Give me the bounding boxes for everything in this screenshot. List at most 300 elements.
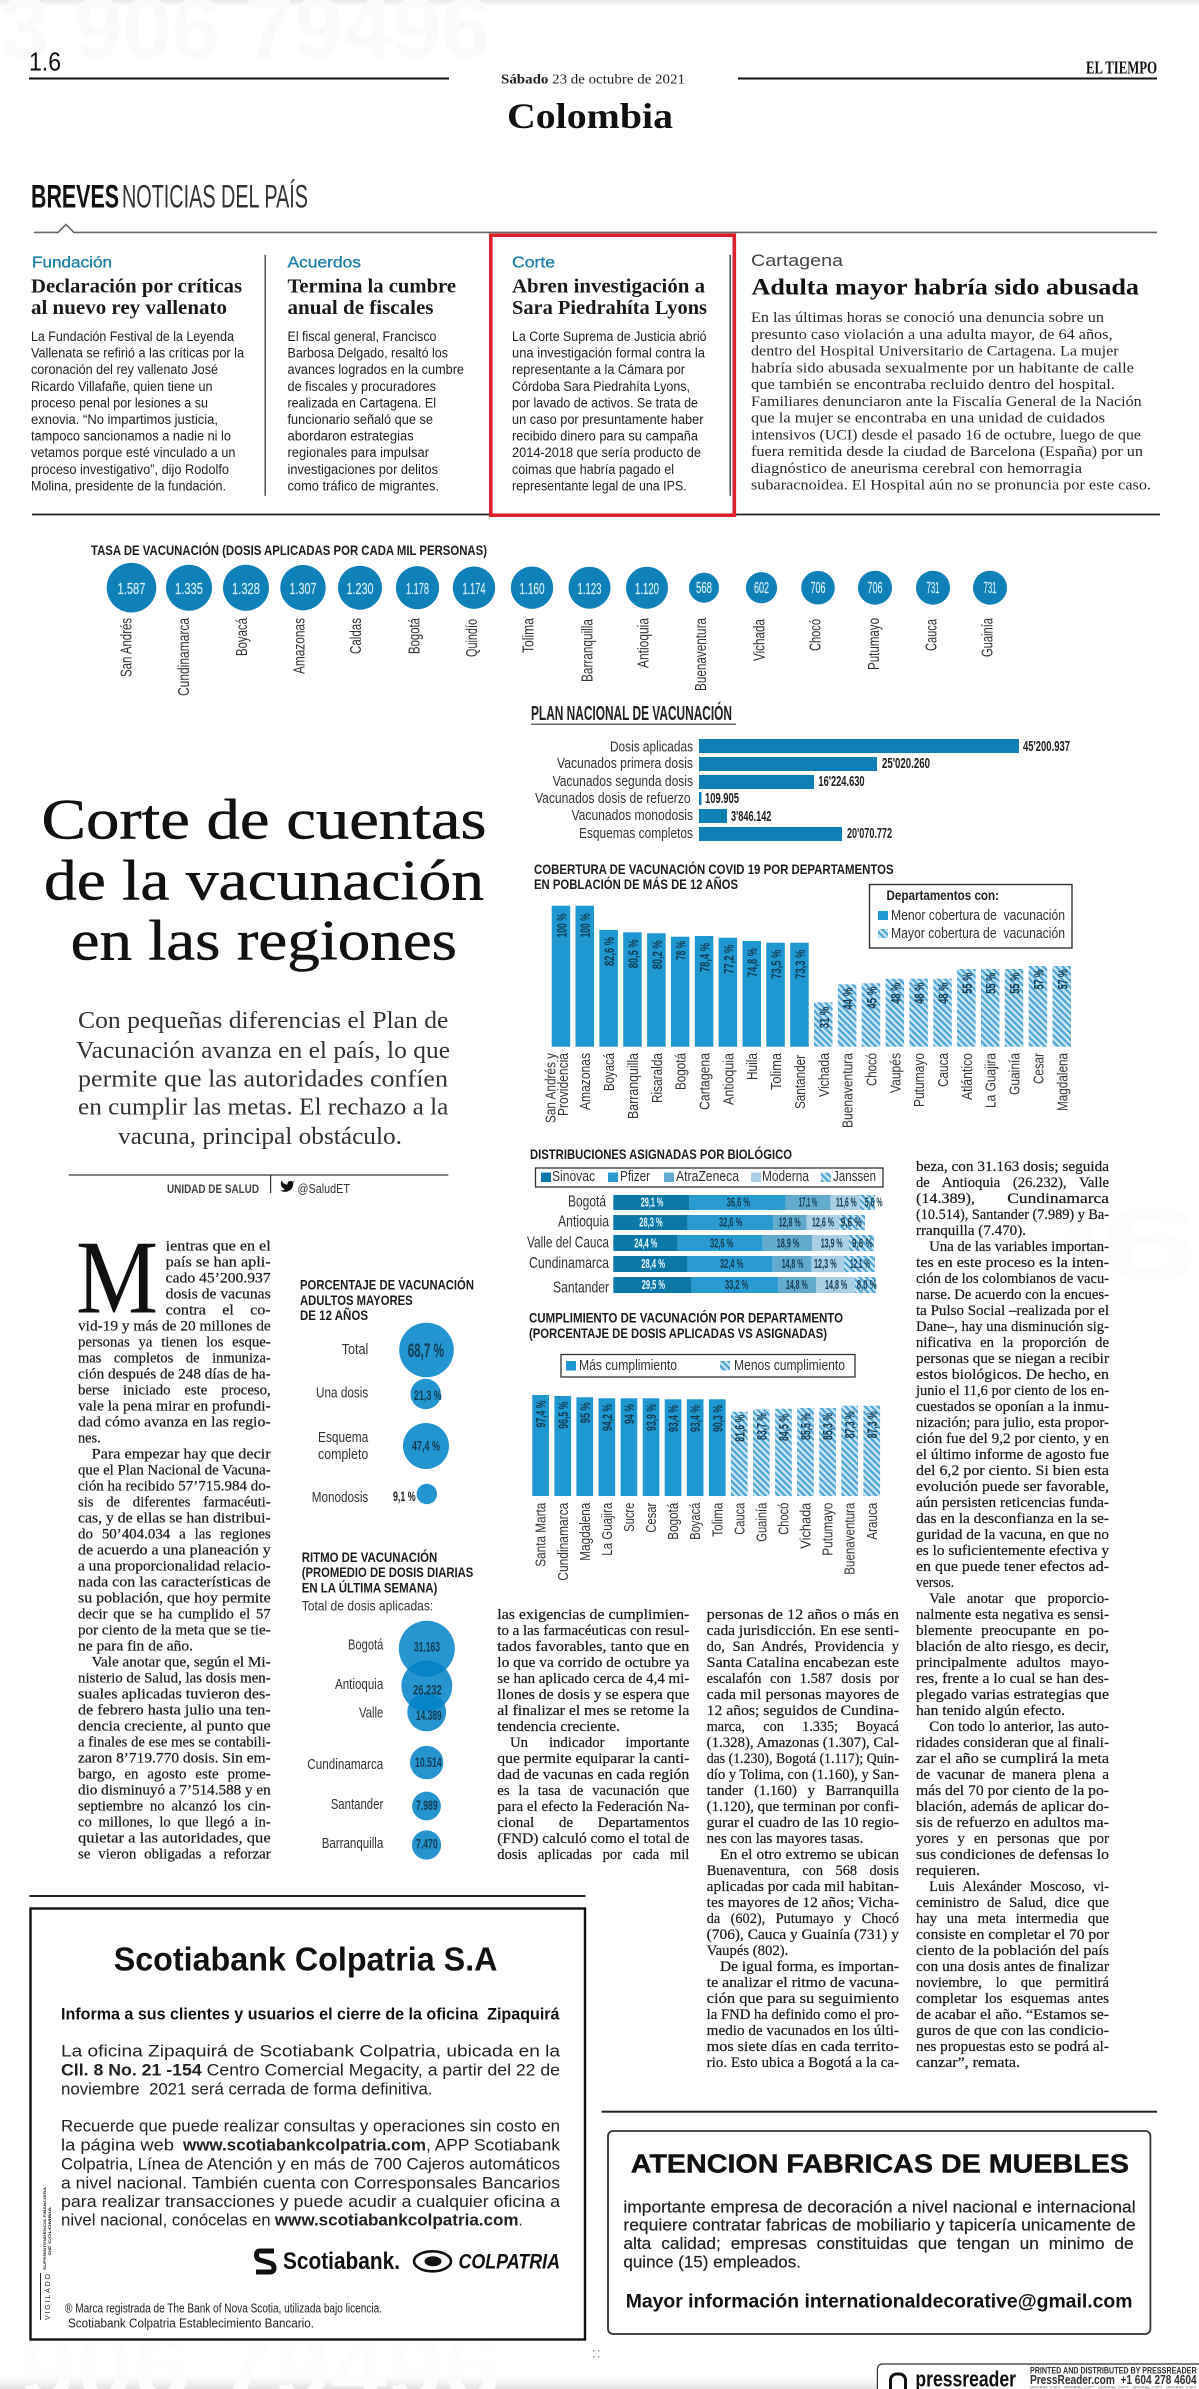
kicker: Corte [512,255,555,272]
segment values: 11,6 % [836,1195,857,1210]
main headline [42,788,486,973]
icon: pressreader mark [890,2374,906,2389]
ad body text: a nivel nacional. También cuenta con Corresponsales Bancarios [61,2173,560,2192]
bar values: 87,3 % [842,1411,858,1438]
ad body text: la página web [61,2136,174,2155]
article column 4: Vale anotar que proporcio- [929,1591,1109,1607]
article column 4: en que puede tener efectos ad- [916,1559,1109,1575]
watermark: copy number: 96 [1000,1186,1199,1303]
article column 4: nalmente esta negativa es sensi- [916,1607,1109,1623]
region labels: Vichada [752,619,769,661]
article column 1: sis de diferentes farmacéuti- [78,1494,271,1510]
article column 1: Para empezar hay que decir [92,1446,271,1462]
department labels: Boyacá [687,1502,704,1540]
bubble values: 14.389 [416,1707,442,1723]
bubble values: 1.120 [635,581,659,598]
logo: Colpatria: COLPATRIA [458,2250,560,2273]
article column 4: yores y en personas que por [916,1831,1109,1847]
body text: La Corte Suprema de Justicia abrió [512,329,706,344]
row labels: Cundinamarca [529,1255,609,1272]
article column 3: En el otro extremo se ubican [720,1847,900,1863]
chart: tasa de vacunación: 731 [984,580,997,597]
region labels: Cundinamarca [176,618,193,696]
department labels: Vaupés [887,1053,904,1093]
article column 2: es la tasa de vacunación que [497,1783,689,1799]
bubble values: 1.178 [406,581,429,598]
legend: Departamentos con: [886,887,999,903]
row labels: completo [318,1446,368,1463]
article column 3: tander (1.160) y Barranquilla [707,1783,900,1799]
article column 1: a una proporcionalidad relacio- [78,1558,271,1574]
logo: Colpatria [414,2250,560,2273]
bar values: 3'846.142 [731,808,771,825]
kicker: Fundación [32,255,112,272]
department labels: Guainía [753,1502,770,1542]
bar labels: Esquemas completos [579,825,693,842]
article column 4: de Antioquia (26.232), Valle [916,1175,1109,1191]
department labels: Chocó [864,1053,880,1086]
article column 4: estos biológicos. De hecho, en [916,1367,1110,1383]
subheadline [76,1008,450,1150]
subheadline: Vacunación avanza en el país, lo que [76,1038,450,1064]
article column 2: para el efecto la Federación Na- [497,1799,689,1815]
newspaper logo: EL TIEMPO [1086,58,1157,78]
article column 1: septiembre no alcanzó los cin- [78,1798,271,1814]
byline: @SaludET [298,1182,350,1196]
article column 2: lo que va corrido de octubre ya [497,1655,690,1671]
segment values: 14,8 % [782,1256,804,1271]
region labels: Bogotá [407,618,424,654]
region labels: Cauca [924,619,941,651]
ad body text: nivel nacional, conócelas en [61,2211,271,2230]
bar labels [535,739,693,842]
chart: tasa de vacunación [91,541,1007,696]
article column 4: consiste en completar el 70 por [916,1927,1109,1943]
article column 2: cional de Departamentos [497,1815,690,1831]
article column 4: ciento de la población del país [916,1943,1109,1959]
bar values: 93,4 % [665,1405,681,1432]
panel: brief Acuerdos [288,255,464,493]
bar values: 85,5 % [798,1413,814,1440]
department labels: Cesar [1030,1053,1047,1084]
bar values: 94 % [621,1404,637,1424]
department labels: La Guajira [983,1052,1000,1108]
article column 1: vid-19 y más de 20 millones de [78,1318,271,1334]
bar values: 82,6 % [601,937,617,966]
department labels: Santander [792,1055,809,1109]
chart title: COBERTURA DE VACUNACIÓN COVID 19 POR DEPARTAMENTOS [534,860,894,877]
body text: como tráfico de migrantes. [288,478,439,493]
bar labels: Vacunados segunda dosis [553,773,693,790]
bar values: 87,3 % [864,1411,880,1438]
article column 4: hay una meta intermedia que [916,1911,1109,1927]
article column 3: das (1.230), Bogotá (1.117); Quin- [707,1751,899,1767]
icon: twitter bird [280,1180,295,1192]
article column 1: mas completos de inmuniza- [78,1350,271,1366]
bar values: 78,4 % [696,943,712,972]
article column 1: quietar a las autoridades, que [78,1830,271,1846]
article column 4: requieren. [916,1863,980,1879]
department labels: Barranquilla [625,1052,642,1119]
bar values: 45'200.937 [1023,738,1070,755]
main headline: en las regiones [71,910,457,973]
department labels: Cauca [731,1502,748,1535]
body text: Familiares denunciaron ante la Fiscalía General de la Nación [751,394,1142,410]
bar values: 73,5 % [768,949,784,979]
chart title [534,860,894,892]
headline: al nuevo rey vallenato [31,297,227,319]
chart: porcentaje de vacunación adultos [300,1275,474,1506]
body text: Ricardo Villafañe, quien tiene un [31,379,212,394]
body text: recibido dinero para su campaña [512,429,698,444]
subheadline: vacuna, principal obstáculo. [118,1124,402,1150]
article column 4: evolución puede ser favorable, [916,1479,1109,1495]
body text: Molina, presidente de la fundación. [31,478,226,493]
body text: investigaciones por delitos [288,462,438,477]
department labels: Tolima [768,1052,785,1090]
department labels: San Andrés y [543,1053,560,1123]
body text: avances logrados en la cumbre [288,362,464,377]
hatched bars [814,966,1071,1047]
article column 1: decir que se ha cumplido el 57 [78,1606,271,1622]
department labels: Huila [744,1052,761,1080]
department labels: Santa Marta [533,1502,550,1567]
headline: Sara Piedrahíta Lyons [512,297,707,319]
article column 4: zar el año se cumplirá la meta [916,1751,1110,1767]
article column 4: guridad de la vacuna, en que no [916,1527,1109,1543]
article column 1: suales aplicadas tuvieron des- [78,1686,271,1702]
article column 1: su población, que hoy permite [78,1590,271,1606]
bar values: 90,3 % [709,1405,725,1432]
body text: tampoco sancionamos a nadie ni lo [31,429,231,444]
ad title: Scotiabank Colpatria S.A [114,1941,497,1978]
article column 1: dosis de vacunas [166,1286,271,1302]
article column 1: dad cómo avanza en las regio- [78,1414,271,1430]
row labels: Total [342,1341,368,1358]
department labels: Cartagena [696,1052,714,1110]
article column 4: blación, además de aplicar do- [916,1799,1109,1815]
bar values: 83,7 % [753,1413,769,1440]
article column 3: ción que para su seguimiento [707,1991,899,2007]
article column 4: das en la desconfianza en la se- [916,1511,1109,1527]
article column 4: aún persisten reticencias funda- [916,1495,1109,1511]
segment values: 33,2 % [725,1277,749,1292]
ad body text: Cll. 8 No. 21 -154 [61,2061,202,2080]
article column 4: rranquilla (7.470). [916,1223,1026,1239]
body text: fuera remitida desde la ciudad de Barcelona (España) por un [751,444,1144,460]
bubble values: 568 [696,580,712,597]
bar values: 74,8 % [744,948,760,977]
headline [512,276,707,319]
page number: 1.6 [29,47,61,77]
bar values [554,913,1070,1028]
article column 1: que el Plan Nacional de Vacuna- [78,1462,271,1478]
chart: cobertura de vacunación [534,860,1072,1128]
row labels: Cundinamarca [307,1756,384,1773]
article column 1: dencia creciente, al punto que [78,1718,271,1734]
bubble values [118,580,997,598]
bubble values: 7.989 [416,1797,438,1813]
body text: Barbosa Delgado, resaltó los [288,346,448,361]
bubbles [399,1621,455,1860]
article column 4: sus condiciones de defensas lo [916,1847,1109,1863]
bubble values: 31.163 [414,1638,440,1654]
department labels: Cundinamarca [555,1502,572,1581]
article column 3: aplicadas por cada mil habitan- [707,1879,899,1895]
department labels: Putumayo [820,1503,837,1556]
bar values: 25'020.260 [882,755,930,772]
segment values [634,1195,883,1292]
chart title: TASA DE VACUNACIÓN (DOSIS APLICADAS POR CADA MIL PERSONAS) [91,541,487,558]
region labels: Antioquia [635,618,652,668]
body text: En las últimas horas se conoció una denuncia sobre un [751,310,1105,326]
legend: Moderna [762,1168,810,1185]
article column 1: a finales de ese mes se contabili- [78,1734,271,1750]
article column 4: ta Pulso Social –realizada por el [916,1303,1109,1319]
stacked bar: Antioquia [613,1215,865,1230]
department labels: Bogotá [665,1502,682,1540]
legend: Janssen [833,1168,876,1185]
body text: coronación del rey vallenato José [31,362,218,377]
body text [512,329,706,493]
segment values: 13,9 % [821,1236,843,1251]
department labels: Arauca [864,1502,881,1540]
chart title [300,1275,474,1323]
article column 1: de febrero hasta julio una ten- [78,1702,271,1718]
legend [870,884,1072,948]
row labels: Bogotá [348,1636,384,1653]
article column 1: se vieron obligadas a reforzar [78,1846,271,1862]
segment values: 29,1 % [641,1195,664,1210]
region labels: Guainía [979,618,996,657]
article column 1: cas, y de ellas se han distribui- [78,1510,271,1526]
article column 3: Buenaventura, con 568 dosis [707,1863,899,1879]
region labels: San Andrés [118,618,136,677]
bubble values: 1.160 [520,581,545,598]
department labels: Cauca [935,1052,952,1087]
article column 4: Dane–, hay una disminución sig- [916,1319,1109,1335]
headline: Termina la cumbre [288,276,456,298]
article column 3: do, San Andrés, Providencia y [707,1639,900,1655]
chart: plan nacional de vacunación [531,701,1070,842]
article column 1: ción después de 248 días de ha- [78,1366,271,1382]
segment values: 12,8 % [779,1215,801,1230]
bar values: 97,4 % [533,1400,549,1428]
article column 4: del 6,2 por ciento. Si bien esta [916,1463,1110,1479]
body text: abordaron estrategias [288,429,414,444]
ad body text: , APP Scotiabank [426,2136,561,2155]
row labels: Antioquia [335,1676,384,1693]
chart: ritmo de vacunación [302,1548,473,1860]
article column 4: nificativa en la proporción de [916,1335,1109,1351]
department labels: Magdalena [1054,1052,1071,1111]
article column 3: dío y Tolima, con (1.160), y San- [707,1767,899,1783]
article column 1: cado 45’200.937 [166,1270,271,1286]
segment values: 17,1 % [799,1195,818,1210]
department labels: Risaralda [649,1052,666,1103]
region labels: Amazonas [291,618,308,674]
bubble values: 7.470 [416,1835,438,1851]
subheadline: permite que las autoridades confíen [78,1066,448,1092]
vigilado stamp: VIGILADO [45,2273,52,2320]
row labels: Esquema [318,1429,369,1446]
ad body text: alta calidad; empresas constituidas que tengan un minimo de [623,2234,1134,2253]
ad title: ATENCION FABRICAS DE MUEBLES [631,2149,1129,2179]
headline: anual de fiscales [288,297,434,319]
body text: que también se encontraba recluido dentro del hospital. [751,377,1115,393]
region labels [118,618,996,696]
article column 2: to a las farmacéuticas con resul- [497,1623,689,1639]
department labels: Amazonas [577,1053,594,1110]
bubble values: 21,3 % [414,1387,442,1403]
bubble values: 1.174 [462,581,486,598]
ad subtitle: Informa a sus clientes y usuarios el cierre de la oficina Zipaquirá [61,2004,560,2023]
article column 4: ridades consideran que al finali- [916,1735,1109,1751]
row labels: Santander [331,1796,383,1813]
article column 1: personas ya tienen los esque- [78,1334,271,1350]
breves heading: BREVES [31,179,119,215]
department labels: Antioquia [720,1052,737,1105]
department labels: Chocó [776,1503,792,1535]
legend: Más cumplimiento [579,1357,677,1374]
region labels: Boyacá [234,618,251,656]
bubble values: 1.335 [175,581,203,598]
ad body text [61,2042,561,2230]
chart title: ADULTOS MAYORES [300,1292,413,1308]
ad body text: noviembre 2021 será cerrada de forma definitiva. [61,2079,432,2098]
region labels: Buenaventura [693,618,710,691]
body text: exnovia. “No impartimos justicia, [31,412,218,427]
department labels [533,1502,881,1581]
article column 1: por ciento de la meta que se tie- [78,1622,271,1638]
article column 3: Vaupés (802). [707,1943,788,1959]
bar values [533,1400,880,1442]
article column 3: escalafón con 1.587 dosis por [707,1671,899,1687]
article column 4: canzar”, remata. [916,2055,1020,2071]
legend [536,1168,883,1187]
bar values: 80,5 % [625,939,641,968]
bubble values: 1.230 [346,581,374,598]
body text [288,329,464,493]
article column 1: nes. [78,1430,101,1446]
article column 4: tes en este proceso es la inten- [916,1255,1109,1271]
ad body text: . [519,2211,522,2230]
article column 3: (1.328), Amazonas (1.307), Cal- [707,1735,899,1751]
body text: representante legal de una IPS. [512,478,687,493]
legend: Mayor cobertura de vacunación [891,925,1065,942]
segment values: 32,6 % [719,1215,743,1230]
article column 1: zaron 8’719.770 dosis. Sin em- [78,1750,271,1766]
bar labels: Vacunados primera dosis [557,755,693,772]
headline: Abren investigación a [512,276,705,298]
row labels [312,1341,369,1506]
body text: un caso por presuntamente haber [512,412,704,427]
segment values: 32,4 % [720,1256,744,1271]
article column 1: contra el co- [166,1302,271,1318]
department labels [543,1052,1071,1128]
row labels [527,1194,610,1297]
bar values: 20'070.772 [847,825,892,842]
bubble values: 731 [926,580,940,597]
solid bars [552,906,809,1047]
article column 4: sis de refuerzo en adultos ma- [916,1815,1109,1831]
body text: habría sido abusada sexualmente por un habitante de calle [751,360,1134,376]
article column 4: (10.514), Santander (7.989) y Ba- [916,1207,1109,1223]
subheadline: en cumplir las metas. El rechazo a la [78,1095,449,1121]
headline [288,276,456,319]
article column 2: se han aplicado cerca de 4,4 mi- [497,1671,689,1687]
chart title: EN POBLACIÓN DE MÁS DE 12 AÑOS [534,875,738,892]
article column 4: beza, con 31.163 dosis; seguida [916,1159,1110,1175]
article column 3 [707,1607,900,2071]
bar values: 57 % [1030,969,1046,989]
bar values: 55 % [983,972,999,994]
chart title: (PROMEDIO DE DOSIS DIARIAS [302,1564,473,1580]
department labels: La Guajira [599,1502,616,1556]
bubble values: 26.232 [413,1682,442,1698]
article column 4: han tenido algún efecto. [916,1703,1065,1719]
article column 1: país se han apli- [166,1254,271,1270]
legend: Pfizer [620,1168,650,1185]
hatched bars [731,1406,880,1496]
bars [699,739,1019,841]
segment values: 5,6 % [865,1195,883,1210]
article column 3: (706), Cauca y Guainía (731) y [707,1927,900,1943]
article column 4: cuestados se oponían a la inmu- [916,1399,1109,1415]
region labels: Chocó [807,619,824,651]
segment values: 28,4 % [641,1256,665,1271]
article column 1: ne para fin de año. [78,1638,193,1654]
legal note: ® Marca registrada de The Bank of Nova Scotia, utilizada bajo licencia. [65,2301,382,2315]
article column 1 [78,1238,272,1862]
chart title: EN LA ÚLTIMA SEMANA) [302,1578,437,1596]
chart title [302,1548,473,1596]
row labels: Monodosis [312,1489,368,1506]
row labels: Antioquia [558,1214,609,1231]
body text: coimas que habría pagado el [512,462,674,477]
body text: proceso investigativo”, dijo Rodolfo [31,462,229,477]
body text: 2014-2018 que sería producto de [512,445,701,460]
headline: Declaración por críticas [31,276,242,298]
segment values: 29,5 % [642,1277,665,1292]
bar values: 45 % [864,986,880,1009]
article column 3: te analizar el ritmo de vacuna- [707,1975,899,1991]
bubble values: 47,4 % [412,1438,440,1454]
segment values: 14,8 % [786,1277,808,1292]
panel: Scotiabank advertisement [30,1908,585,2340]
ad body text: La oficina Zipaquirá de Scotiabank Colpatria, ubicada en la [61,2042,561,2061]
department labels: Tolima [709,1502,726,1537]
ad body text: Centro Comercial Megacity, a partir del 22 de [207,2061,560,2080]
drop cap: M [76,1218,158,1336]
ad body text [623,2197,1136,2271]
main headline: Corte de cuentas [42,788,486,851]
legend: Menor cobertura de vacunación [891,907,1065,924]
bubbles [399,1323,454,1504]
legend [561,1354,855,1377]
bar values: 77,2 % [720,944,736,974]
bubble values: 706 [810,580,826,597]
chart title: CUMPLIMIENTO DE VACUNACIÓN POR DEPARTAMENTO [529,1309,843,1326]
article column 2 [497,1607,690,1863]
article column 3: cada mil personas mayores de [707,1687,899,1703]
segment values: 24,4 % [634,1236,658,1251]
department labels: Buenaventura [840,1052,857,1128]
legend: Menos cumplimiento [734,1357,845,1374]
article column 4: con una dosis antes de finalizar [916,1959,1109,1975]
article column 1: ción ha recibido 57’715.984 do- [78,1478,271,1494]
article column 4: ción fue del 9,2 por ciento, y en [916,1431,1110,1447]
